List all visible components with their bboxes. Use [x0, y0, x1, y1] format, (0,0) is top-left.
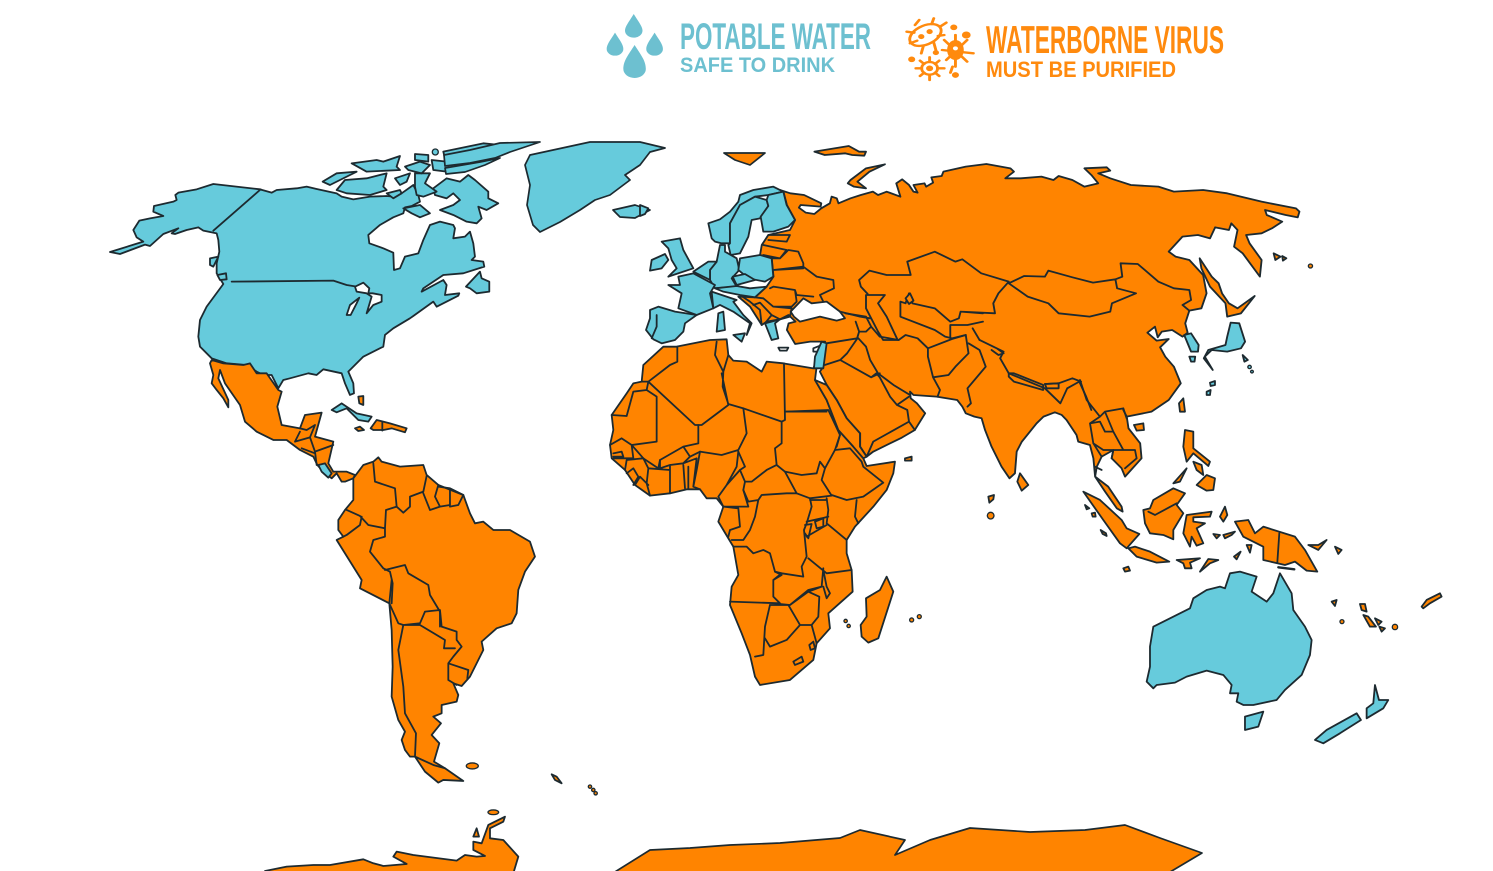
borders: Russia, Mongolia and China	[1009, 263, 1191, 317]
island: Ellesmere south	[445, 158, 500, 174]
borders: North Africa	[612, 342, 827, 445]
subheading: safe to drink: SAFE TO DRINK	[680, 54, 835, 77]
region: Svalbard	[724, 153, 765, 165]
island: South Sandwich far	[594, 792, 597, 795]
borders: Kazakhstan and Central Asia	[859, 252, 1009, 340]
country: Eswatini	[809, 642, 815, 650]
island: Sulawesi	[1183, 512, 1212, 547]
island: Jeju	[1189, 357, 1195, 362]
island: Faroe	[640, 205, 648, 216]
island: New Britain	[1308, 540, 1327, 550]
region: Europe	[640, 187, 870, 368]
country: France	[668, 273, 715, 315]
world map	[110, 142, 1442, 871]
lake: Victoria	[815, 518, 823, 528]
island: Axel Heiberg	[443, 143, 500, 158]
island: Commander	[1308, 264, 1313, 268]
island: Sardinia and Corsica	[717, 312, 725, 332]
region: Antarctica	[265, 774, 597, 871]
island: Torres	[1278, 567, 1294, 569]
country: Japan	[1204, 323, 1245, 370]
borders: Sahel	[632, 408, 840, 482]
island: Southampton	[403, 205, 430, 217]
island: Aru	[1247, 545, 1252, 553]
borders: eastern Europe	[740, 235, 870, 325]
borders: Middle East	[825, 313, 915, 457]
sea: Black Sea	[791, 298, 845, 322]
island: Timor	[1200, 559, 1218, 572]
border: Alaska and Canada	[213, 189, 261, 231]
landmass: East Antarctica	[610, 825, 1202, 871]
region: Africa	[610, 339, 921, 685]
island: Izu	[1243, 355, 1248, 362]
island: Ryukyu south	[1207, 390, 1211, 395]
border: Canada and United States	[232, 281, 357, 287]
island: South Shetland	[473, 828, 479, 837]
country: South Korea	[1184, 333, 1199, 352]
island: Chagos	[987, 512, 994, 519]
island: Java	[1128, 547, 1169, 563]
island: Sri Lanka	[1017, 473, 1028, 491]
island: Baffin	[433, 175, 498, 223]
island: Bahamas	[358, 396, 363, 405]
island: Mauritius	[917, 615, 921, 619]
borders: Iran, Afghanistan and Pakistan	[899, 335, 986, 407]
country: Bhutan	[1045, 383, 1059, 388]
island: Sakhalin and Hokkaido	[1200, 258, 1255, 317]
region: Asia and eastern Europe	[738, 146, 1313, 512]
island: Cuba	[332, 403, 372, 422]
region: Greenland and Ellesmere	[444, 142, 665, 232]
region: Southeast Asia	[987, 380, 1442, 743]
island: Hainan	[1134, 423, 1144, 431]
island: Greenland	[525, 142, 665, 232]
country: Nepal	[1009, 373, 1043, 390]
border: New Guinea	[1277, 533, 1279, 563]
island: Samar	[1193, 462, 1203, 475]
island: Vanuatu	[1392, 624, 1398, 630]
island: Fiji	[1422, 593, 1442, 608]
country: Israel	[814, 342, 827, 368]
country: Czech Republic	[733, 274, 755, 285]
island: Maldives	[988, 495, 994, 503]
country: Italy	[712, 292, 752, 335]
lake: Aral	[906, 293, 913, 304]
island: Bathurst	[405, 162, 430, 173]
island: Mindanao	[1197, 475, 1215, 491]
island: Sumatra	[1083, 492, 1139, 548]
island: Novaya Zemlya	[848, 164, 885, 188]
island: Reunion	[910, 618, 914, 622]
island: Solomon	[1332, 600, 1337, 606]
sea: Caspian outline	[866, 295, 898, 340]
country: Spain	[646, 307, 697, 343]
country: Denmark and Germany	[710, 245, 739, 288]
borders: Indochina	[1080, 380, 1137, 470]
landmass: Australia	[1147, 572, 1312, 705]
island: Axel Heiberg dot	[432, 149, 438, 155]
border: Portugal	[652, 315, 657, 338]
island: South Sandwich	[588, 785, 592, 788]
island: Ryukyu	[1210, 381, 1215, 386]
island: Vancouver	[210, 257, 218, 267]
heading: waterborne virus: WATERBORNE VIRUS	[986, 19, 1224, 62]
island: Sicily	[733, 333, 745, 342]
island: New Caledonia	[1363, 615, 1376, 627]
island: South Orkney	[488, 810, 499, 815]
island: Devon	[432, 160, 468, 172]
island: Puget area	[217, 273, 227, 280]
region: North America (safe water)	[110, 143, 500, 395]
landmass: South America	[337, 457, 535, 783]
island: Banks	[323, 172, 357, 185]
borders: northern South America	[343, 463, 463, 627]
island: Taiwan	[1179, 398, 1185, 412]
island: Ellesmere	[444, 142, 540, 166]
island: Bonin	[1248, 365, 1251, 369]
country: Costa Rica	[318, 463, 332, 478]
island: Kuril	[1274, 253, 1281, 260]
island: New Guinea	[1235, 520, 1317, 572]
landmass: Africa	[610, 339, 895, 685]
country: Austria and Hungary	[715, 286, 767, 297]
island: New Zealand south	[1315, 713, 1361, 743]
island: Norfolk	[1340, 620, 1344, 624]
borders: Central America	[295, 425, 333, 465]
island: Devon west	[415, 154, 428, 162]
legend: potable water	[607, 14, 871, 78]
island: Socotra	[905, 457, 912, 461]
country: Norway	[708, 187, 783, 243]
island: Melville	[352, 156, 400, 172]
lake: Great Lakes east	[355, 283, 382, 313]
region: Central America and Caribbean	[210, 360, 535, 783]
icon: water drops	[607, 14, 663, 78]
heading: potable water: POTABLE WATER	[680, 16, 871, 57]
island: South Georgia	[552, 774, 562, 783]
island: Kuril small	[1282, 256, 1286, 261]
island: Comoros	[844, 619, 847, 623]
island: Mayotte	[847, 624, 850, 628]
island: Borneo	[1143, 488, 1185, 539]
island: King William	[387, 190, 402, 198]
island: Ireland	[650, 254, 668, 271]
country: Netherlands and Belgium	[693, 262, 717, 280]
island: Crete	[778, 348, 788, 351]
island: Hispaniola	[371, 420, 407, 432]
country: Sweden	[728, 197, 768, 255]
island: Flores	[1177, 558, 1200, 568]
border: Hispaniola	[380, 422, 385, 431]
island: Luzon	[1183, 430, 1210, 466]
landmass: Mexico and Central America	[210, 360, 355, 482]
island: Isle of Pines	[1379, 627, 1385, 632]
borders: Central Africa	[723, 490, 828, 577]
country: Finland	[761, 192, 795, 232]
island: New Caledonia north	[1360, 604, 1367, 612]
borders: southern South America	[389, 580, 468, 768]
borders: Horn of Africa	[785, 435, 883, 540]
borders: China and Myanmar	[1045, 378, 1081, 384]
island: Madagascar	[861, 577, 893, 643]
island: Tasmania	[1245, 712, 1263, 730]
borders: Southern Africa	[730, 525, 852, 657]
island: Victoria	[337, 173, 387, 195]
legend: waterborne virus	[905, 18, 1224, 82]
subheading: must be purified: MUST BE PURIFIED	[986, 57, 1176, 82]
landmass: Canada and United States	[110, 184, 484, 395]
island: Siberut	[1092, 513, 1096, 517]
country: Poland	[738, 255, 773, 282]
island: Franz Josef	[814, 146, 866, 156]
island: South Sandwich south	[592, 788, 595, 792]
island: Bonin south	[1251, 370, 1253, 373]
country: United Kingdom	[662, 238, 693, 277]
island: New Zealand north	[1367, 685, 1388, 718]
island: Buru	[1213, 534, 1220, 538]
border: Borneo	[1148, 503, 1177, 515]
island: Palawan	[1173, 468, 1187, 483]
island: Loyalty	[1375, 618, 1382, 625]
island: Iceland	[613, 205, 650, 218]
island: Christmas	[1123, 567, 1130, 572]
island: Halmahera	[1220, 507, 1227, 522]
country: Lesotho	[793, 657, 803, 665]
island: Tanimbar	[1234, 552, 1241, 559]
landmass: Antarctic Peninsula	[265, 817, 518, 871]
lake: Michigan	[347, 298, 359, 315]
borders: West Africa	[610, 438, 748, 507]
island: Newfoundland	[466, 272, 489, 293]
sea: Red Sea filled	[815, 380, 867, 458]
island: Jamaica	[355, 427, 364, 431]
island: Cyprus	[813, 346, 820, 352]
landmass: Eurasia	[738, 164, 1299, 512]
island: Seram	[1223, 532, 1235, 538]
borders: Himalaya, India and China	[980, 340, 1091, 410]
island: Somerset	[415, 173, 437, 197]
island: Falklands	[466, 763, 478, 769]
icon: virus cluster	[905, 18, 973, 80]
island: Prince of Wales	[395, 173, 410, 185]
island: Bougainville	[1335, 547, 1342, 554]
country: Greece	[765, 319, 780, 340]
island: Nias	[1085, 505, 1089, 509]
island: Enggano	[1101, 530, 1107, 536]
